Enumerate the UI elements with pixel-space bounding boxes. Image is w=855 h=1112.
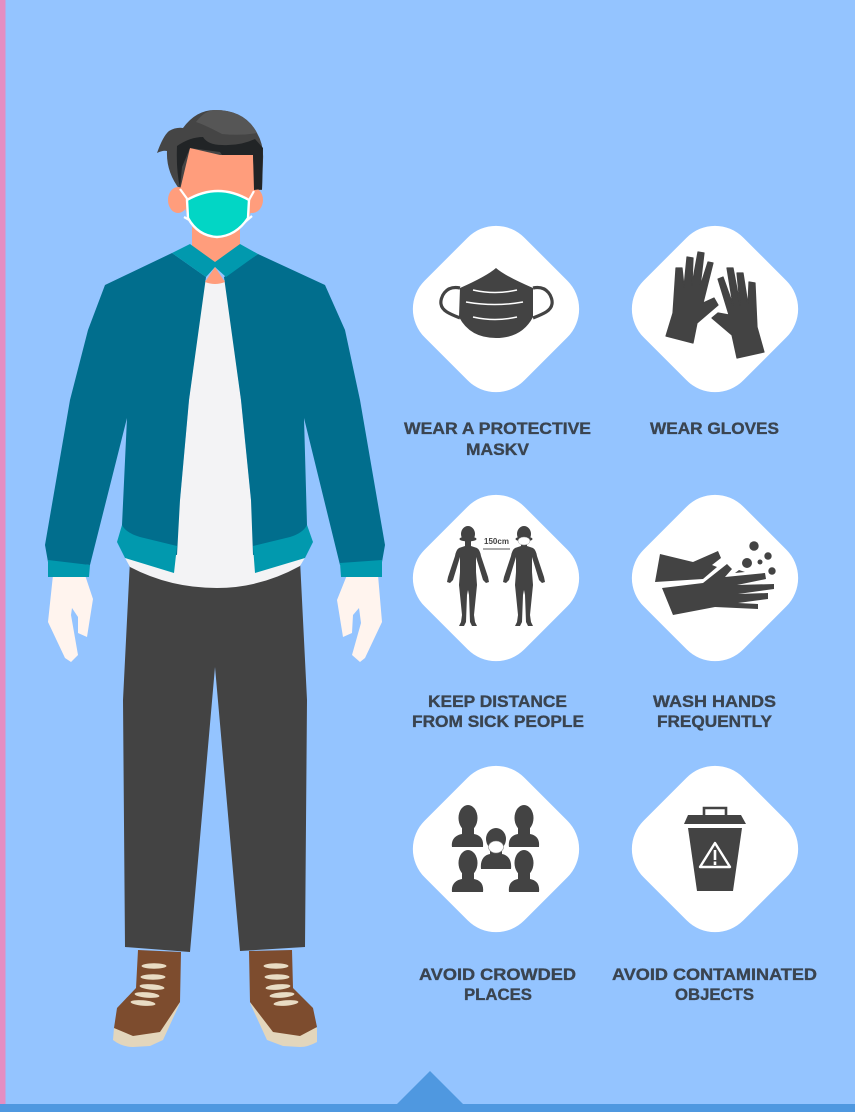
figure: neck xyxy=(192,225,240,263)
icon: gloves xyxy=(666,252,764,358)
icon tile xyxy=(396,478,596,678)
bottom bar with triangle xyxy=(0,1071,855,1112)
panel: wash hands xyxy=(615,478,815,711)
label: distance second line: FROM SICK PEOPLE xyxy=(412,713,584,731)
icon tile xyxy=(396,749,596,949)
label: AVOID CROWDED xyxy=(419,966,576,984)
figure: left boot xyxy=(113,950,181,1047)
figure: head with hair xyxy=(157,110,263,236)
figure: white shirt xyxy=(124,280,306,588)
figure: chest skin xyxy=(205,267,225,284)
panel: wear gloves xyxy=(615,209,815,438)
icon: two people 150cm apart xyxy=(447,526,545,626)
panel: wear a protective mask xyxy=(396,209,596,438)
figure: right boot xyxy=(249,950,317,1047)
label: mask second line: MASKV xyxy=(466,441,529,459)
icon: two people 150cm apart: 150cm xyxy=(484,537,509,546)
figure: jacket right side and sleeve xyxy=(224,254,385,565)
left accent strip xyxy=(0,0,6,1112)
panel: avoid crowded places xyxy=(396,749,596,984)
figure: jacket left side and sleeve xyxy=(45,253,206,565)
figure: jacket waistband and cuffs xyxy=(48,525,382,577)
figure: right glove xyxy=(337,575,382,662)
icon: crowd xyxy=(452,805,539,892)
figure: collar xyxy=(172,244,258,277)
icon: washing hands xyxy=(655,541,776,615)
icon tile xyxy=(615,209,815,409)
figure: man wearing mask and gloves xyxy=(45,110,385,1047)
label: WEAR GLOVES xyxy=(650,420,779,438)
icon: surgical mask xyxy=(441,268,552,338)
label: WASH HANDS xyxy=(653,693,776,711)
figure: face mask xyxy=(180,189,254,237)
icon tile xyxy=(615,478,815,678)
figure: trousers xyxy=(123,560,307,952)
icon tile xyxy=(615,749,815,949)
label: contaminated second line: OBJECTS xyxy=(675,986,754,1004)
label: KEEP DISTANCE xyxy=(428,693,567,711)
figure: left glove xyxy=(48,575,93,662)
label: crowded second line: PLACES xyxy=(464,986,532,1004)
label: WEAR A PROTECTIVE xyxy=(404,420,591,438)
icon: trash bin with warning xyxy=(684,808,746,891)
label: AVOID CONTAMINATED xyxy=(612,966,817,984)
panel: keep distance xyxy=(396,478,596,711)
panel: avoid contaminated objects xyxy=(612,749,817,984)
label: wash second line: FREQUENTLY xyxy=(657,713,772,731)
icon tile xyxy=(396,209,596,409)
